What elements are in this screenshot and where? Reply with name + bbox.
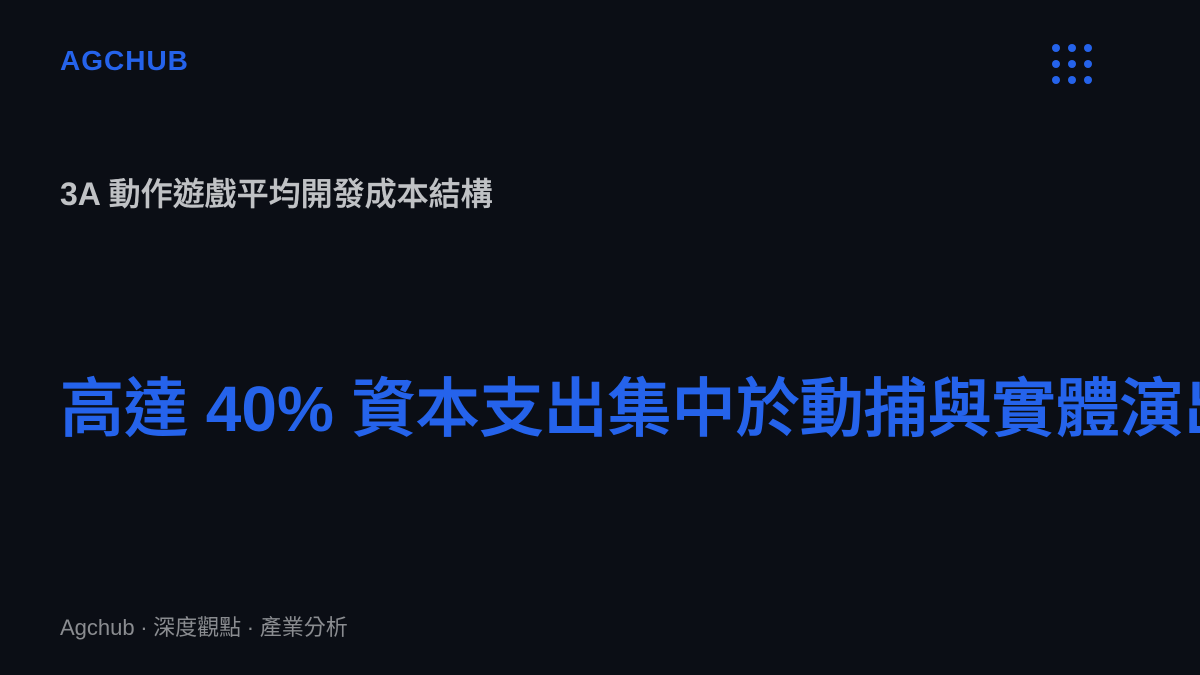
icon: dot grid bbox=[1052, 44, 1092, 84]
subtitle: 3A 動作遊戲平均開發成本結構 bbox=[60, 176, 493, 212]
footer: Agchub · 深度觀點 · 產業分析 bbox=[60, 615, 348, 640]
brand logo: AGCHUB bbox=[60, 45, 189, 76]
